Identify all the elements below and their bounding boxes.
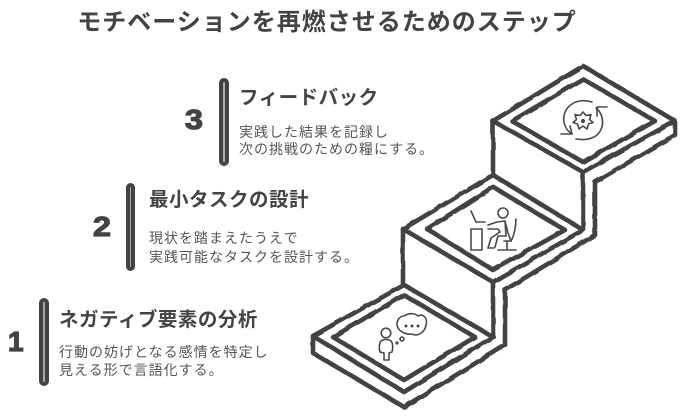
description 2: 実践可能なタスクを設計する。: [149, 249, 359, 265]
number 2: 2: [93, 212, 111, 242]
divider bar 1: [41, 300, 47, 384]
icon: person thinking: [379, 314, 426, 360]
description 1: 見える形で言語化する。: [59, 362, 224, 378]
description 3: 実践した結果を記録し: [239, 124, 389, 140]
heading: negative factor analysis: ネガティブ要素の分析: [59, 308, 258, 331]
number 3: 3: [185, 105, 203, 135]
heading: minimum task design: 最小タスクの設計: [149, 188, 309, 211]
description 2: 現状を踏まえたうえで: [149, 230, 299, 246]
icon: person at desk: [471, 208, 516, 250]
step 2 text: [93, 185, 359, 269]
step 3 text: [185, 80, 434, 164]
title: モチベーションを再燃させるためのステップ: [77, 9, 577, 36]
description 3: 次の挑戦のための糧にする。: [239, 141, 434, 157]
divider bar 3: [221, 80, 227, 164]
number 1: 1: [8, 326, 24, 357]
platform 2: [403, 175, 583, 282]
staircase outline: [313, 66, 675, 407]
platform 3: [493, 66, 675, 172]
icon: cycle with gear: [561, 101, 607, 140]
divider bar 2: [128, 185, 133, 269]
step 1 text: [8, 300, 269, 384]
description 1: 行動の妨げとなる感情を特定し: [59, 344, 269, 360]
staircase: [313, 66, 675, 407]
platform 1: [313, 285, 493, 392]
heading: feedback: フィードバック: [239, 87, 379, 109]
